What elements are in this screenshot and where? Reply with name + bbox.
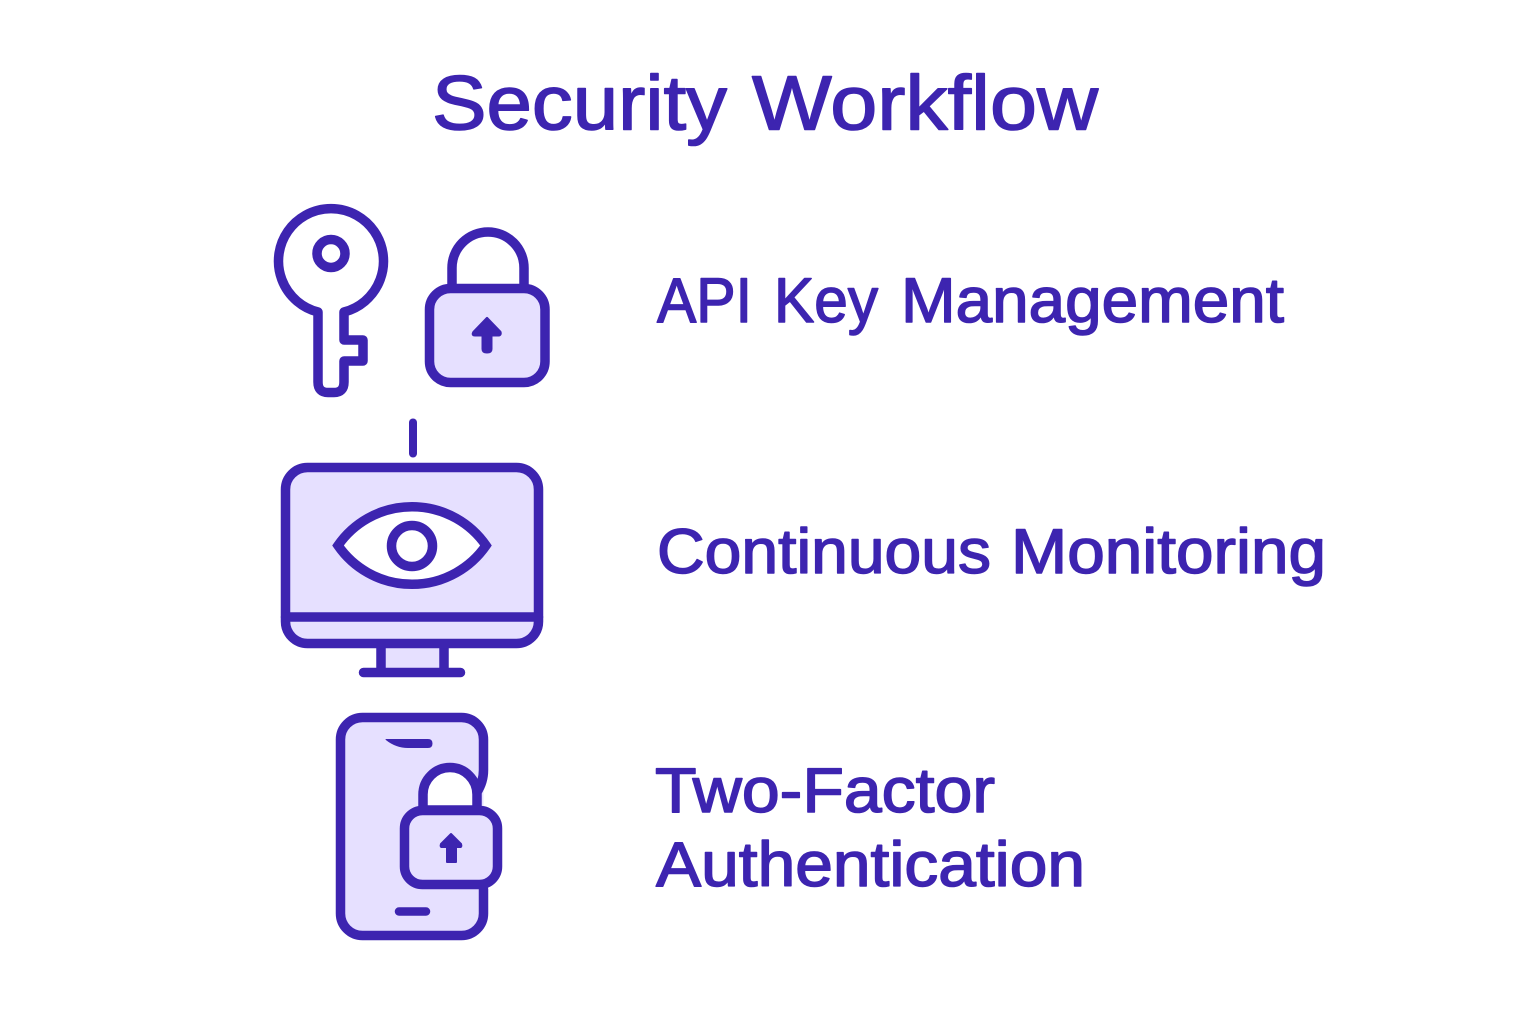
phone padlock	[423, 768, 477, 810]
icon: key	[278, 209, 384, 392]
label: API Key Management: Management	[901, 266, 1285, 336]
pupil	[392, 526, 432, 566]
label: Two-Factor Authentication: Two-Factor	[655, 756, 995, 826]
icon: padlock	[430, 232, 545, 382]
home button	[399, 907, 426, 916]
label: API Key Management	[657, 266, 1285, 336]
icon: phone with padlock	[340, 718, 498, 936]
eye	[338, 507, 486, 584]
label: Two-Factor Authentication	[655, 756, 1085, 900]
title	[432, 60, 1098, 146]
title: Security	[432, 60, 728, 146]
speaker	[386, 740, 432, 748]
label: Two-Factor Authentication: Authentication	[656, 830, 1085, 900]
label: API Key Management: Key	[774, 266, 878, 336]
title: Workflow	[752, 60, 1098, 146]
icon: monitor with eye	[286, 468, 538, 672]
label: API Key Management: API	[657, 266, 752, 336]
label: Continuous Monitoring: Monitoring	[1011, 517, 1326, 587]
connector line	[409, 422, 417, 454]
label: Continuous Monitoring	[657, 517, 1326, 587]
label: Continuous Monitoring: Continuous	[657, 517, 991, 587]
